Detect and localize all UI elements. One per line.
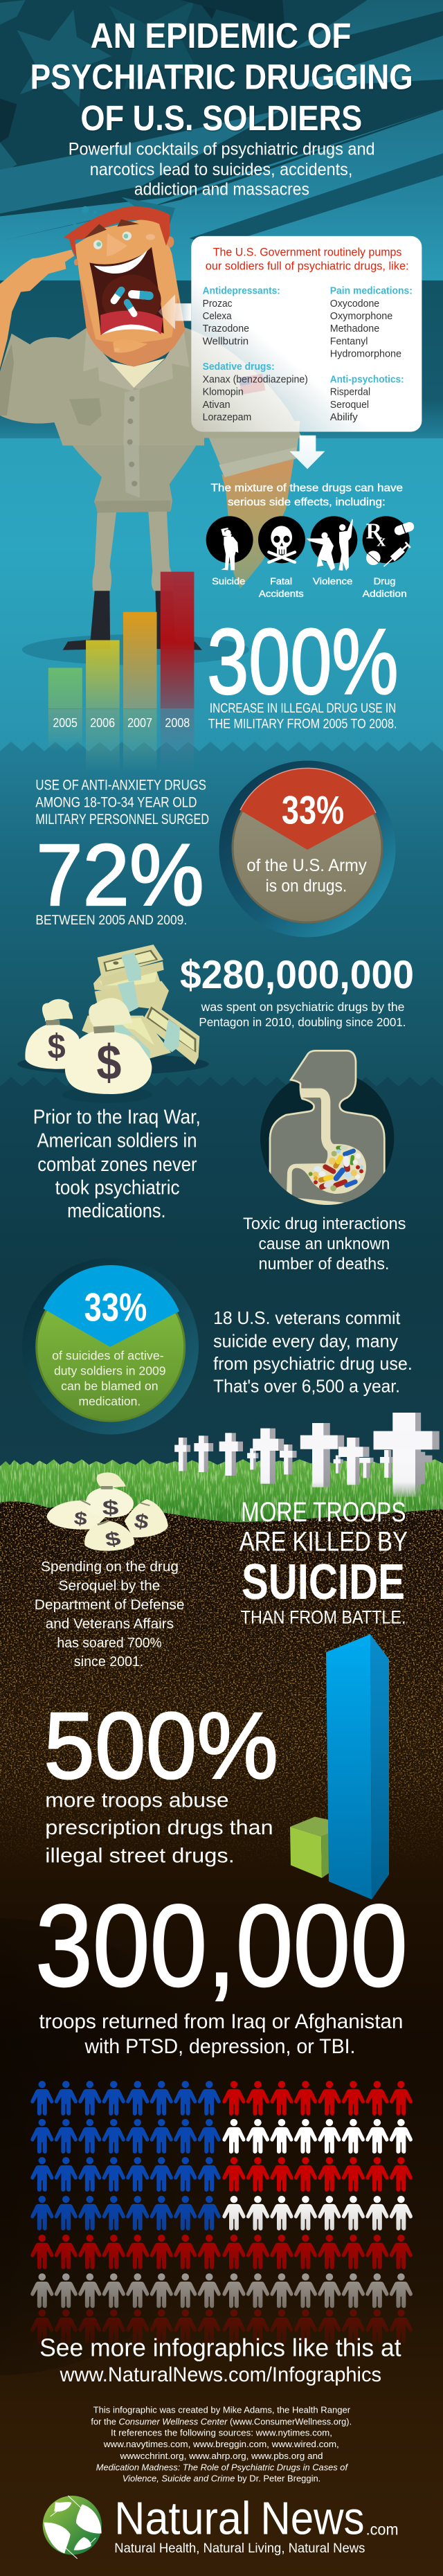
side effect labels: Fatal	[270, 576, 292, 587]
icon: drug addiction: x	[377, 532, 386, 551]
sedative list	[203, 361, 308, 423]
side effect labels: Suicide	[212, 576, 245, 587]
pain medications list: Oxycodone	[330, 298, 379, 310]
cross fronts	[179, 1413, 415, 1497]
text: more troops killed by suicide	[239, 1496, 408, 1627]
anti-psychotics list: Risperdal	[330, 386, 370, 398]
text: toxic drug interactions: Toxic drug interactions	[243, 1215, 406, 1233]
text: Seroquel spending: since 2001.	[74, 1654, 143, 1670]
icon: money bags and cash stacks	[17, 945, 209, 1103]
logo wordmark: Natural	[114, 2493, 251, 2544]
anti-psychotics list	[330, 374, 404, 423]
stat: 72% anti-anxiety: BETWEEN 2005 AND 2009.	[35, 913, 187, 928]
cross arm sides	[174, 1431, 440, 1463]
text: Seroquel spending: Seroquel by the	[58, 1578, 160, 1593]
background: zigzag lower section	[0, 742, 443, 1087]
sedative list: Xanax (benzodiazepine)	[203, 374, 308, 385]
text: Seroquel spending: and Veterans Affairs	[46, 1616, 174, 1631]
stat: $280,000,000: $280,000,000	[180, 953, 414, 997]
title: OF U.S. SOLDIERS	[80, 98, 362, 138]
side effect labels: Addiction	[363, 589, 407, 600]
arrow: panel to mouth	[159, 294, 191, 330]
side effect labels: Accidents	[259, 589, 304, 600]
text: prior to the Iraq War: took psychiatric	[55, 1177, 180, 1199]
chart: 3D bars prescription vs street drugs	[290, 1634, 389, 1899]
raised arm	[0, 250, 74, 368]
call to action: www.NaturalNews.com/Infographics	[60, 2363, 381, 2386]
text: 18 veterans a day: 18 U.S. veterans commit	[213, 1308, 401, 1328]
stat: 72% anti-anxiety: MILITARY PERSONNEL SURGED	[35, 810, 209, 828]
antidepressants list: Antidepressants:	[203, 285, 280, 296]
text: toxic drug interactions	[243, 1215, 406, 1273]
icon: fatal accidents skull	[258, 516, 305, 563]
bar chart: illegal drug use 2005-2008: 2007	[127, 715, 152, 730]
stat: 300%: THE MILITARY FROM 2005 TO 2008.	[208, 717, 397, 731]
side effect labels: Drug	[374, 576, 395, 587]
pain medications list: Methadone	[330, 323, 379, 334]
icon: four money bags: $	[133, 1510, 151, 1533]
text: 18 veterans a day: That's over 6,500 a year.	[213, 1376, 400, 1397]
text: toxic drug interactions: number of deaths.	[258, 1255, 389, 1273]
credits and sources: Medication Madness: The Role of Psychiatric Drugs in Cases of	[96, 2462, 348, 2472]
logo wordmark: News	[260, 2493, 365, 2544]
credits and sources: It references the following sources: www.nytimes.com,	[111, 2428, 332, 2438]
credits and sources: This infographic was created by Mike Adams, the Health Ranger	[93, 2405, 351, 2415]
title	[30, 16, 413, 138]
soldier right arm and hand	[202, 421, 300, 589]
text: prior to the Iraq War: American soldiers in	[37, 1130, 197, 1152]
pain medications list: Pain medications:	[330, 285, 413, 296]
crosses in graveyard	[174, 1413, 440, 1497]
sedative list: Sedative drugs:	[203, 361, 275, 373]
text: Seroquel spending: Spending on the drug	[41, 1559, 179, 1575]
icon: Natural News leaf logo	[43, 2496, 102, 2559]
stat: 500%: more troops abuse	[45, 1789, 229, 1812]
subtitle: Powerful cocktails of psychiatric drugs and	[69, 140, 375, 159]
bar chart: illegal drug use 2005-2008: 2006	[90, 715, 115, 730]
neck and undershirt	[110, 358, 165, 388]
antidepressants list: Prozac	[203, 298, 233, 310]
logo wordmark: Natural Health, Natural Living, Natural News	[114, 2541, 365, 2556]
side effects intro	[210, 482, 403, 508]
soil ground	[0, 1498, 443, 2576]
antidepressants list: Celexa	[203, 310, 232, 322]
icon: four money bags: $	[103, 1528, 123, 1550]
subtitle: addiction and massacres	[134, 180, 309, 199]
cross sides	[179, 1413, 425, 1497]
credits and sources: www.navytimes.com, www.breggin.com, www.wired.com,	[103, 2439, 339, 2449]
text: prior to the Iraq War: medications.	[67, 1200, 166, 1222]
pie: 33% of active-duty suicides: of suicides of active-	[52, 1349, 164, 1363]
stat: 72% anti-anxiety: 72%	[36, 827, 204, 924]
pain medications list: Hydromorphone	[330, 348, 401, 360]
pie: 33% of U.S. Army: is on drugs.	[266, 877, 347, 895]
pills	[320, 1148, 355, 1187]
credits and sources	[91, 2405, 352, 2484]
side effect icons	[206, 516, 415, 571]
sedative list: Klomopin	[203, 386, 244, 398]
pie: 33% of active-duty suicides: medication.	[78, 1395, 141, 1408]
arrow: panel down to side effects	[289, 436, 325, 469]
nose	[107, 233, 127, 256]
shirt	[0, 328, 204, 445]
eyebrows	[84, 224, 107, 238]
text: 18 veterans a day: suicide every day, many	[213, 1331, 399, 1351]
icon: money bags and cash stacks: $	[48, 1027, 66, 1066]
sedative list: Ativan	[203, 399, 230, 411]
background: dark band behind soldier	[0, 280, 443, 438]
stat: $280,000,000	[180, 953, 414, 1029]
mouth	[89, 247, 164, 335]
bar chart: illegal drug use 2005-2008	[48, 572, 194, 772]
credits and sources: for the Consumer Wellness Center (www.ConsumerWellness.org).	[91, 2417, 352, 2426]
panel heading	[206, 246, 409, 272]
panel heading: The U.S. Government routinely pumps	[213, 246, 401, 259]
pain medications list: Fentanyl	[330, 336, 368, 347]
anti-psychotics list: Abilify	[330, 411, 358, 423]
bar chart: illegal drug use 2005-2008: 2008	[165, 715, 190, 730]
stat: 300,000	[35, 1881, 408, 2058]
soldier legs and boots	[22, 424, 249, 665]
stat: $280,000,000: was spent on psychiatric drugs by the	[201, 1000, 405, 1014]
antidepressants list	[203, 285, 280, 347]
icon: four money bags	[46, 1472, 168, 1551]
grass	[0, 1458, 443, 1526]
pain medications list: Oxymorphone	[330, 310, 392, 322]
side effect labels: Violence	[313, 576, 352, 587]
panel heading: our soldiers full of psychiatric drugs, like:	[206, 260, 409, 272]
eyes	[93, 240, 102, 249]
pie: 33% of U.S. Army: of the U.S. Army	[246, 856, 367, 875]
hair	[64, 206, 170, 258]
pie: 33% of U.S. Army: 33%	[282, 788, 344, 832]
icon: digestive system full of pills	[260, 1050, 394, 1212]
stat: 300,000: with PTSD, depression, or TBI.	[84, 2035, 355, 2058]
text: toxic drug interactions: cause an unknown	[258, 1235, 390, 1253]
antidepressants list: Wellbutrin	[203, 336, 248, 347]
call to action: See more infographics like this at	[39, 2334, 401, 2361]
text: more troops killed by suicide: THAN FROM BATTLE.	[241, 1607, 406, 1627]
logo wordmark	[114, 2493, 399, 2556]
pie: 33% of U.S. Army	[219, 760, 396, 938]
side effect labels	[212, 576, 407, 600]
icon: four money bags: $	[102, 1496, 119, 1519]
icon: violence	[307, 516, 357, 571]
credits and sources: wwwcchrint.org, www.ahrp.org, www.pbs.org and	[119, 2451, 323, 2461]
side effects intro: The mixture of these drugs can have	[210, 482, 403, 494]
stat: 500%: 500%	[44, 1694, 278, 1798]
icon: drug addiction: R	[366, 518, 383, 543]
soldier upper body and head	[0, 206, 204, 445]
text: Seroquel spending	[35, 1559, 185, 1670]
antidepressants list: Trazodone	[203, 323, 249, 334]
credits and sources: Violence, Suicide and Crime by Dr. Peter Breggin.	[123, 2474, 320, 2484]
text: Seroquel spending: has soared 700%	[57, 1635, 162, 1651]
anti-psychotics list: Seroquel	[330, 399, 369, 411]
text: more troops killed by suicide: ARE KILLED BY	[239, 1526, 408, 1557]
pie: 33% of active-duty suicides: 33%	[84, 1285, 147, 1330]
text: prior to the Iraq War: Prior to the Iraq War,	[33, 1107, 201, 1129]
stat: 300,000: troops returned from Iraq or Afghanistan	[39, 2010, 403, 2033]
subtitle	[69, 140, 375, 199]
stat: 72% anti-anxiety	[35, 776, 209, 928]
background: sunburst rays and stars	[0, 0, 443, 247]
face	[75, 217, 185, 366]
text: prior to the Iraq War: combat zones never	[37, 1154, 197, 1176]
icon: drug addiction	[363, 516, 415, 569]
background: second zigzag section	[0, 1077, 443, 1593]
cross arm fronts	[174, 1431, 432, 1463]
pictogram: troops as U.S. flag	[30, 2081, 413, 2344]
icon: four money bags: $	[73, 1509, 88, 1530]
dark vignette on ground	[0, 1918, 235, 2375]
text: Seroquel spending: Department of Defense	[35, 1597, 185, 1613]
background: teal gradient	[0, 0, 443, 762]
drug list panel	[191, 236, 422, 432]
ears	[167, 236, 174, 247]
stat: 72% anti-anxiety: USE OF ANTI-ANXIETY DRUGS	[35, 776, 206, 793]
title: AN EPIDEMIC OF	[91, 16, 351, 55]
stat: 72% anti-anxiety: AMONG 18-TO-34 YEAR OLD	[35, 794, 197, 810]
call to action	[39, 2334, 401, 2386]
text: prior to the Iraq War	[33, 1107, 201, 1222]
soldier shirt right shoulder	[183, 328, 302, 438]
pie: 33% of active-duty suicides: can be blamed on	[61, 1379, 159, 1393]
logo wordmark: .com	[366, 2521, 399, 2539]
text: 18 veterans a day: from psychiatric drug use.	[213, 1353, 413, 1374]
flag	[239, 374, 265, 395]
icon: money bags and cash stacks: $	[96, 1035, 121, 1090]
pills in mouth	[109, 285, 126, 305]
stat: 500%	[44, 1694, 278, 1867]
spit drops	[82, 206, 89, 213]
icon: suicide	[206, 516, 253, 570]
subtitle: narcotics lead to suicides, accidents,	[90, 160, 352, 179]
anti-psychotics list: Anti-psychotics:	[330, 374, 404, 385]
pie: 33% of active-duty suicides: duty soldiers in 2009	[54, 1364, 166, 1378]
text: 18 veterans a day	[213, 1308, 413, 1397]
pie: 33% of active-duty suicides	[22, 1258, 199, 1435]
sedative list: Lorazepam	[203, 411, 251, 423]
pain medications list	[330, 285, 413, 360]
bar chart: illegal drug use 2005-2008: 2005	[53, 715, 78, 730]
stat: $280,000,000: Pentagon in 2010, doubling since 2001.	[199, 1015, 406, 1029]
stat: 500%: prescription drugs than	[45, 1816, 273, 1839]
side effects intro: serious side effects, including:	[228, 496, 386, 508]
stat: 500%: illegal street drugs.	[45, 1844, 235, 1867]
